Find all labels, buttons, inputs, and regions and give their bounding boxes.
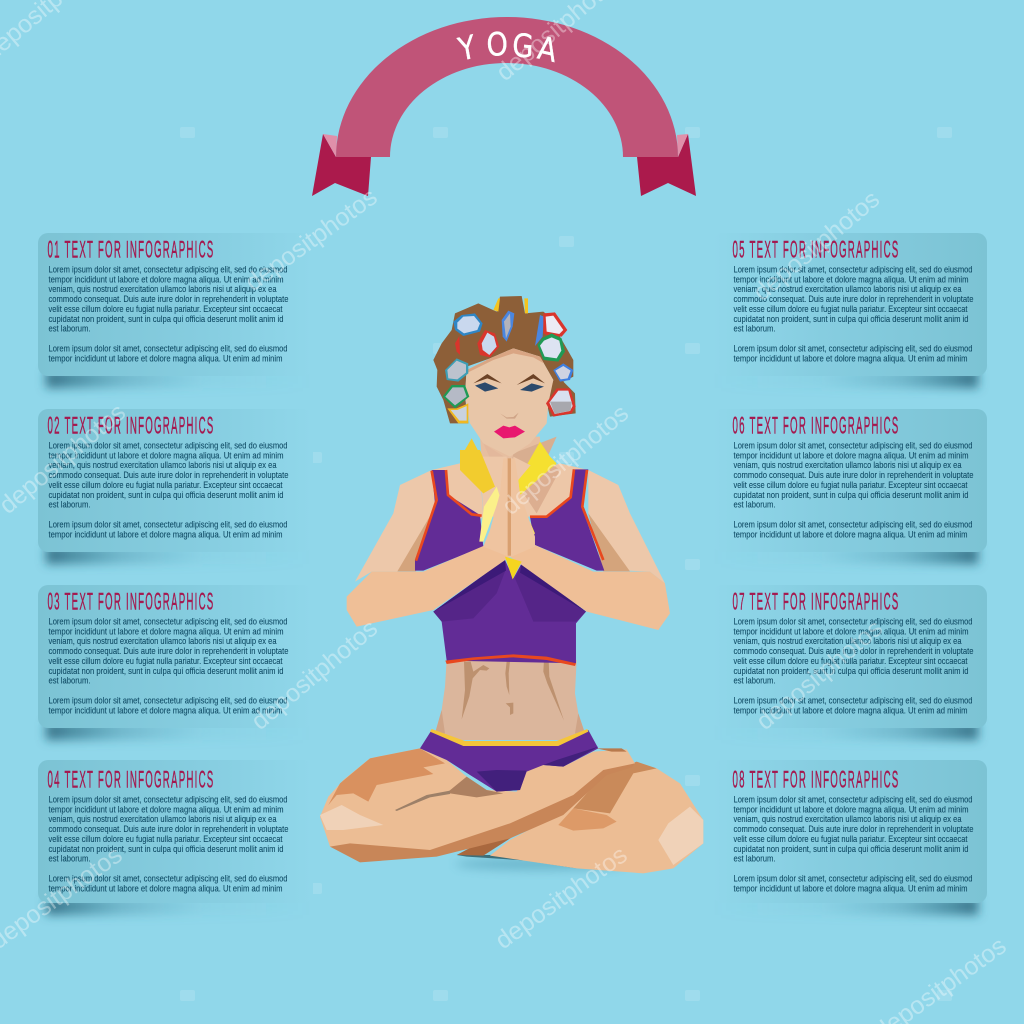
panel 06: tempor incididunt ut labore et dolore magna aliqua. Ut enim ad minim [734, 530, 968, 540]
panel 07: commodo consequat. Duis aute irure dolor in reprehenderit in voluptate [734, 646, 974, 656]
panel 03: 03 TEXT FOR INFOGRAPHICS [48, 588, 214, 616]
panel 03: tempor incididunt ut labore et dolore magna aliqua. Ut enim ad minim [48, 626, 284, 636]
panel 07 [712, 585, 987, 740]
panel 02: commodo consequat. Duis aute irure dolor in reprehenderit in voluptate [48, 470, 289, 480]
panel 05: tempor incididunt ut labore et dolore magna aliqua. Ut enim ad minim [734, 354, 968, 364]
panel 08: Lorem ipsum dolor sit amet, consectetur adipiscing elit, sed do eiusmod [734, 874, 973, 884]
panel 01 [38, 233, 313, 388]
panel 07: veniam, quis nostrud exercitation ullamco laboris nisi ut aliquip ex ea [734, 636, 962, 646]
panel 02: est laborum. [48, 500, 90, 510]
panel 03: veniam, quis nostrud exercitation ullamco laboris nisi ut aliquip ex ea [48, 636, 277, 646]
panel 08: velit esse cillum dolore eu fugiat nulla pariatur. Excepteur sint occaecat [734, 834, 968, 844]
panel 04: cupidatat non proident, sunt in culpa qui officia deserunt mollit anim id [48, 844, 284, 854]
panel 04: Lorem ipsum dolor sit amet, consectetur adipiscing elit, sed do eiusmod [48, 874, 288, 884]
panel 01: cupidatat non proident, sunt in culpa qui officia deserunt mollit anim id [48, 314, 284, 324]
panel 06 [712, 409, 987, 564]
watermarks: depositphotos [490, 841, 632, 955]
panel 04: tempor incididunt ut labore et dolore magna aliqua. Ut enim ad minim [48, 884, 282, 894]
panel 01: veniam, quis nostrud exercitation ullamco laboris nisi ut aliquip ex ea [48, 284, 277, 294]
panel 02: tempor incididunt ut labore et dolore magna aliqua. Ut enim ad minim [48, 450, 284, 460]
panel 03: velit esse cillum dolore eu fugiat nulla pariatur. Excepteur sint occaecat [48, 656, 283, 666]
panel 06: veniam, quis nostrud exercitation ullamco laboris nisi ut aliquip ex ea [734, 460, 962, 470]
panel 07: cupidatat non proident, sunt in culpa qui officia deserunt mollit anim id [734, 666, 969, 676]
panel 08: commodo consequat. Duis aute irure dolor in reprehenderit in voluptate [734, 824, 974, 834]
abdomen muscles [435, 658, 585, 740]
panel 04: commodo consequat. Duis aute irure dolor in reprehenderit in voluptate [48, 824, 289, 834]
panel 05: Lorem ipsum dolor sit amet, consectetur adipiscing elit, sed do eiusmod [734, 344, 973, 354]
yoga figure [320, 296, 703, 873]
panel 02 [38, 409, 313, 564]
panel 04: est laborum. [48, 854, 90, 864]
panel 01: tempor incididunt ut labore et dolore magna aliqua. Ut enim ad minim [48, 274, 284, 284]
panel 03: cupidatat non proident, sunt in culpa qui officia deserunt mollit anim id [48, 666, 284, 676]
legs and hips [320, 729, 703, 873]
panel 02: tempor incididunt ut labore et dolore magna aliqua. Ut enim ad minim [48, 530, 282, 540]
nose [500, 413, 519, 419]
panel 01: Lorem ipsum dolor sit amet, consectetur adipiscing elit, sed do eiusmod [48, 344, 288, 354]
panel 01: 01 TEXT FOR INFOGRAPHICS [48, 236, 214, 264]
panel 04 [38, 760, 313, 915]
panel 04: Lorem ipsum dolor sit amet, consectetur adipiscing elit, sed do eiusmod [48, 794, 288, 804]
panel 01: tempor incididunt ut labore et dolore magna aliqua. Ut enim ad minim [48, 354, 282, 364]
watermark camera icons [180, 127, 952, 1001]
panel 06: cupidatat non proident, sunt in culpa qui officia deserunt mollit anim id [734, 490, 969, 500]
panel 02: veniam, quis nostrud exercitation ullamco laboris nisi ut aliquip ex ea [48, 460, 277, 470]
panel 02: Lorem ipsum dolor sit amet, consectetur adipiscing elit, sed do eiusmod [48, 440, 288, 450]
panel 07: tempor incididunt ut labore et dolore magna aliqua. Ut enim ad minim [734, 626, 968, 636]
panel 05: tempor incididunt ut labore et dolore magna aliqua. Ut enim ad minim [734, 274, 968, 284]
panel 03 [38, 585, 313, 740]
panel 06: Lorem ipsum dolor sit amet, consectetur adipiscing elit, sed do eiusmod [734, 440, 973, 450]
watermarks: depositphotos [240, 183, 382, 297]
panel 05: est laborum. [734, 324, 776, 334]
panel 01: velit esse cillum dolore eu fugiat nulla pariatur. Excepteur sint occaecat [48, 304, 283, 314]
panel 02: cupidatat non proident, sunt in culpa qui officia deserunt mollit anim id [48, 490, 284, 500]
panel 01: commodo consequat. Duis aute irure dolor in reprehenderit in voluptate [48, 294, 289, 304]
eyebrows [473, 374, 502, 383]
panel 03: commodo consequat. Duis aute irure dolor in reprehenderit in voluptate [48, 646, 289, 656]
panel 07: tempor incididunt ut labore et dolore magna aliqua. Ut enim ad minim [734, 706, 968, 716]
panel 03: Lorem ipsum dolor sit amet, consectetur adipiscing elit, sed do eiusmod [48, 696, 288, 706]
panel 02: 02 TEXT FOR INFOGRAPHICS [48, 412, 214, 440]
panel 06: est laborum. [734, 500, 776, 510]
title ribbon: YOGA: YOGA [455, 26, 560, 71]
panel 06: tempor incididunt ut labore et dolore magna aliqua. Ut enim ad minim [734, 450, 968, 460]
panel 05: Lorem ipsum dolor sit amet, consectetur adipiscing elit, sed do eiusmod [734, 264, 973, 274]
panel 06: commodo consequat. Duis aute irure dolor in reprehenderit in voluptate [734, 470, 974, 480]
panel 08: Lorem ipsum dolor sit amet, consectetur adipiscing elit, sed do eiusmod [734, 794, 973, 804]
panel 01: Lorem ipsum dolor sit amet, consectetur adipiscing elit, sed do eiusmod [48, 264, 288, 274]
panel 03: est laborum. [48, 676, 90, 686]
panel 03: Lorem ipsum dolor sit amet, consectetur adipiscing elit, sed do eiusmod [48, 616, 288, 626]
panel 04: tempor incididunt ut labore et dolore magna aliqua. Ut enim ad minim [48, 804, 284, 814]
panel 05: veniam, quis nostrud exercitation ullamco laboris nisi ut aliquip ex ea [734, 284, 962, 294]
panel 01: est laborum. [48, 324, 90, 334]
ground shadow [455, 858, 625, 870]
panel 03: tempor incididunt ut labore et dolore magna aliqua. Ut enim ad minim [48, 706, 282, 716]
lips [494, 426, 525, 438]
torso and arms [347, 450, 670, 666]
title ribbon: YOGA [312, 17, 696, 196]
panel 06: velit esse cillum dolore eu fugiat nulla pariatur. Excepteur sint occaecat [734, 480, 968, 490]
hair [433, 296, 576, 423]
panel 02: Lorem ipsum dolor sit amet, consectetur adipiscing elit, sed do eiusmod [48, 520, 288, 530]
watermarks: depositphotos [751, 614, 888, 736]
head [433, 296, 576, 480]
panel 08: veniam, quis nostrud exercitation ullamco laboris nisi ut aliquip ex ea [734, 814, 962, 824]
eyes [475, 382, 498, 392]
panel 07: Lorem ipsum dolor sit amet, consectetur adipiscing elit, sed do eiusmod [734, 696, 973, 706]
watermarks: depositphotos [246, 614, 383, 736]
face [465, 348, 553, 457]
panel 02: velit esse cillum dolore eu fugiat nulla pariatur. Excepteur sint occaecat [48, 480, 283, 490]
panel 04: veniam, quis nostrud exercitation ullamco laboris nisi ut aliquip ex ea [48, 814, 277, 824]
panel 04: velit esse cillum dolore eu fugiat nulla pariatur. Excepteur sint occaecat [48, 834, 283, 844]
panel 05 [712, 233, 987, 388]
panel 05: commodo consequat. Duis aute irure dolor in reprehenderit in voluptate [734, 294, 974, 304]
panel 08: est laborum. [734, 854, 776, 864]
panel 08 [712, 760, 987, 915]
panel 08: tempor incididunt ut labore et dolore magna aliqua. Ut enim ad minim [734, 804, 968, 814]
panel 05: velit esse cillum dolore eu fugiat nulla pariatur. Excepteur sint occaecat [734, 304, 968, 314]
watermarks: depositphotos [497, 399, 634, 521]
panel 07: velit esse cillum dolore eu fugiat nulla pariatur. Excepteur sint occaecat [734, 656, 968, 666]
panel 08: cupidatat non proident, sunt in culpa qui officia deserunt mollit anim id [734, 844, 969, 854]
panel 07: Lorem ipsum dolor sit amet, consectetur adipiscing elit, sed do eiusmod [734, 616, 973, 626]
panel 05: cupidatat non proident, sunt in culpa qui officia deserunt mollit anim id [734, 314, 969, 324]
panel 06: Lorem ipsum dolor sit amet, consectetur adipiscing elit, sed do eiusmod [734, 520, 973, 530]
panel 08: tempor incididunt ut labore et dolore magna aliqua. Ut enim ad minim [734, 884, 968, 894]
panel 07: est laborum. [734, 676, 776, 686]
rollers [453, 313, 483, 336]
panel 04: 04 TEXT FOR INFOGRAPHICS [48, 766, 214, 794]
watermarks: depositphotos [748, 185, 885, 307]
